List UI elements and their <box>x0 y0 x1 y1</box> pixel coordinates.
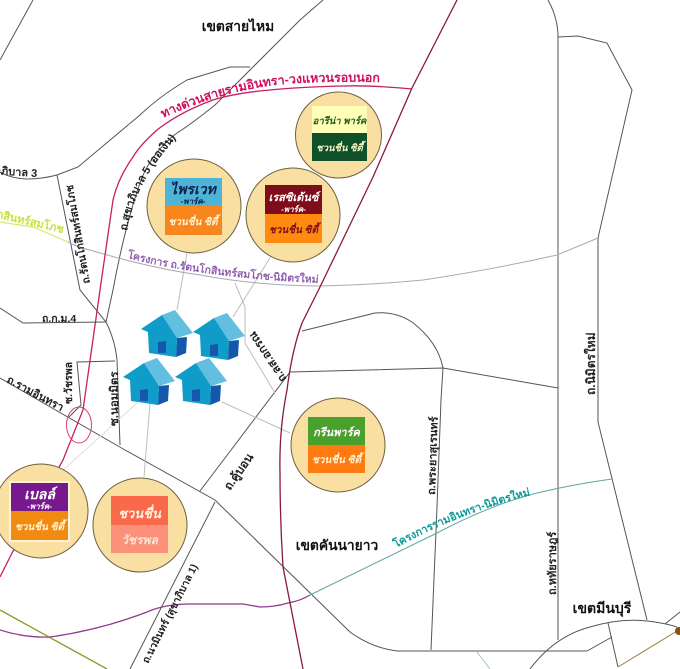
leader lines <box>60 253 490 669</box>
badge: Residence Park: -พาร์ค- <box>281 204 306 214</box>
house 1 <box>141 310 193 357</box>
project label: Ratanakosin to Nimit Mai: โครงการ ถ.รัตนโกสินทร์สมโภช-นิมิตรใหม่ <box>128 249 318 284</box>
badge: Phraewa Park <box>147 159 241 253</box>
badge: Residence Park: เรสซิเด้นซ์ <box>269 191 321 204</box>
road label: Nawamin: ถ.นวมินทร์ (สุขาภิบาล 1) <box>140 562 201 666</box>
badge: Bell Park: ชวนชื่น ซิตี้ <box>15 519 68 533</box>
houses <box>123 310 245 405</box>
road label: Hathairat: ถ.หทัยราษฎร์ <box>546 532 559 595</box>
badge: Phraewa Park: -พาร์ค- <box>181 196 206 206</box>
badge: Phraewa Park: ชวนชื่น ซิตี้ <box>169 214 222 228</box>
road label: Nimit Mai: ถ.นิมิตรใหม่ <box>583 332 598 395</box>
badge: Arena Park: ชวนชื่น ซิตี้ <box>316 140 367 154</box>
magenta line <box>0 595 310 637</box>
badge: Chuan Chuen Watcharapol: ชวนชื่น <box>118 504 162 521</box>
badge: Green Park <box>291 398 385 492</box>
road label: Phraya Surenthon: ถ.พระยาสุเรนทร์ <box>425 416 442 495</box>
road label: Kor Kor Mor 4: ถ.ก.ม.4 <box>42 313 76 325</box>
badge: Chuan Chuen Watcharapol <box>93 478 187 572</box>
badge: Arena Park <box>296 92 382 178</box>
road label: Ratanakosin: ถ.รัตนโกสินทร์สมโภช <box>63 184 93 285</box>
road label: Soi Watcharapol: ซ.วัชรพล <box>63 362 75 404</box>
badge: Bell Park: -พาร์ค- <box>27 501 52 511</box>
badge: Bell Park: เบลล์ <box>24 486 59 502</box>
badge: Arena Park: อารีน่า พาร์ค <box>313 115 367 127</box>
badge: Bell Park <box>0 464 88 558</box>
badge: Residence Park: ชวนชื่น ซิตี้ <box>269 222 322 236</box>
badge: Residence Park <box>246 168 340 262</box>
house 3 <box>123 358 175 405</box>
interchange loop <box>66 407 92 443</box>
badge: Chuan Chuen Watcharapol: วัชรพล <box>121 533 158 547</box>
house 4 <box>175 358 227 405</box>
house 2 <box>193 313 245 360</box>
olive line <box>0 610 107 669</box>
road label: near houses: ถ.ลส.อกรณ <box>247 329 289 384</box>
teal line <box>310 479 612 595</box>
district label: Sai Mai: เขตสายไหม <box>202 18 274 34</box>
purple project line <box>68 238 598 286</box>
road label: Ram Intra: ถ.รามอินทรา <box>5 373 66 414</box>
badge: Phraewa Park: ไพรเวท <box>170 181 218 197</box>
district label: Khan Na Yao: เขตคันนายาว <box>296 538 378 553</box>
road label: Tubon: ถ.คู้บอน <box>221 450 258 493</box>
road label: Sukhaphiban 5: ถ.สุขาภิบาล 5 (ออเงิน) <box>121 134 176 230</box>
project label: Ram Intra to Nimit Mai: โครงการรามอินทรา-นิมิตรใหม่ <box>392 487 530 546</box>
outer ring road <box>280 0 457 669</box>
expressway pink line <box>0 86 412 577</box>
badge: Green Park: ชวนชื่น ซิตี้ <box>312 452 365 466</box>
road label: Soi Nom Mit: ซ.นอมมิตร <box>108 371 121 426</box>
link line and junction dot <box>618 627 680 667</box>
expressway label: ทางด่วนสายรามอินทรา-วงแหวนรอบนอก <box>160 74 380 118</box>
badge: Green Park: กรีนพาร์ค <box>313 426 361 439</box>
district label: Min Buri: เขตมีนบุรี <box>573 600 632 617</box>
yellow project line <box>0 222 68 242</box>
